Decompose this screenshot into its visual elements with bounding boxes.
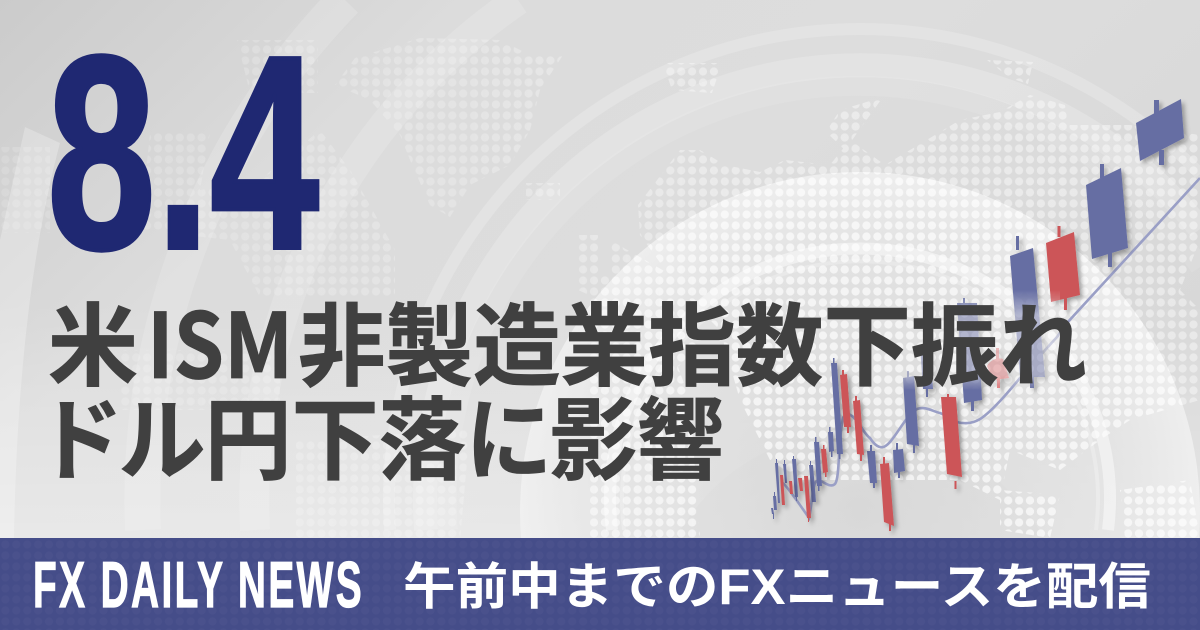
- candlestick chart: [771, 99, 1200, 531]
- footer description: 午前中までのFXニュースを配信: [403, 559, 1151, 615]
- headline line 1: ISM: [147, 274, 293, 404]
- trend line: [783, 178, 1200, 518]
- dotted world map: [474, 40, 1198, 538]
- red candles: [780, 226, 1080, 531]
- blue candles: [771, 99, 1184, 519]
- headline line 1: 非製造業指数下振れ: [298, 274, 1086, 404]
- headline line 2: ドル円下落に影響: [43, 368, 724, 498]
- footer brand: FX DAILY NEWS: [33, 548, 364, 621]
- date: 8.4: 8.4: [47, 0, 320, 307]
- footer bar: [0, 538, 1200, 630]
- headline: [43, 274, 1086, 498]
- headline line 1: 米: [48, 274, 138, 404]
